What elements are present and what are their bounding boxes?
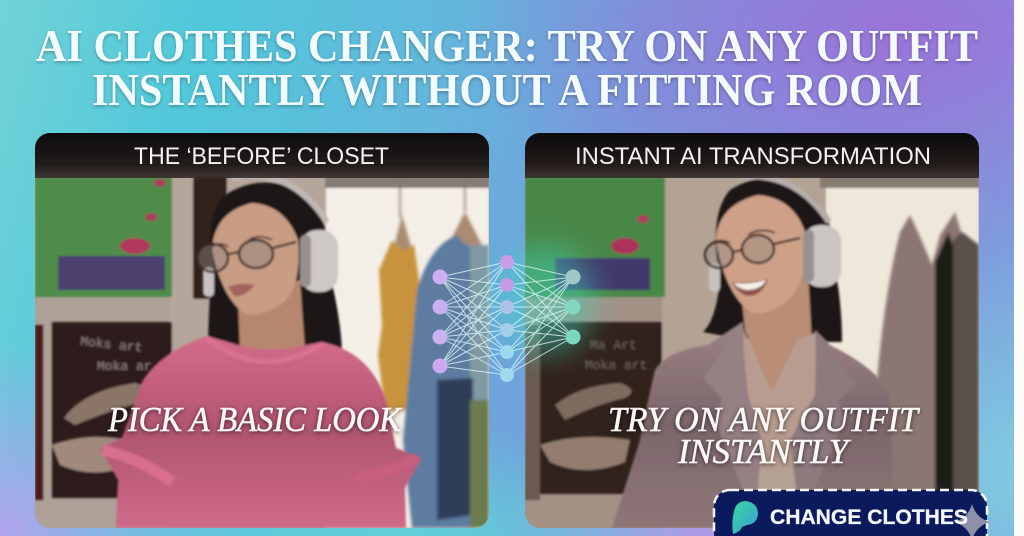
icon: sparkle [954,504,990,536]
button label: CHANGE CLOTHES [770,506,968,529]
panel heading: before: THE ‘BEFORE’ CLOSET [134,143,389,170]
closet background: Moks art [80,334,143,356]
button: change clothes [714,490,990,536]
closet background: Moka ar [97,359,152,374]
closet background [35,177,489,528]
panel: after transformation [525,133,979,528]
person after [612,176,895,528]
neural network icon [432,245,595,382]
caption: try on any outfit instantly [608,400,920,471]
hanging clothes [378,182,489,528]
caption: try on any outfit instantly: TRY ON ANY OUTFIT [608,400,920,439]
blazer [612,322,895,528]
panel: before closet [35,133,489,528]
closet background: Ma Art [590,338,637,353]
closet background: Moka art [585,358,647,373]
closet background [525,177,979,528]
pink sweater [100,336,422,528]
header bar [525,133,979,178]
hanging clothes [877,212,979,528]
caption: try on any outfit instantly: INSTANTLY [677,432,851,471]
title [36,20,978,115]
caption: pick a basic look: PICK A BASIC LOOK [107,400,403,439]
header bar [35,133,489,178]
title: INSTANTLY WITHOUT A FITTING ROOM [92,64,922,115]
panel heading: after: INSTANT AI TRANSFORMATION [575,143,931,170]
icon: logo [732,501,758,534]
person before [100,176,422,528]
shirt [742,328,817,395]
